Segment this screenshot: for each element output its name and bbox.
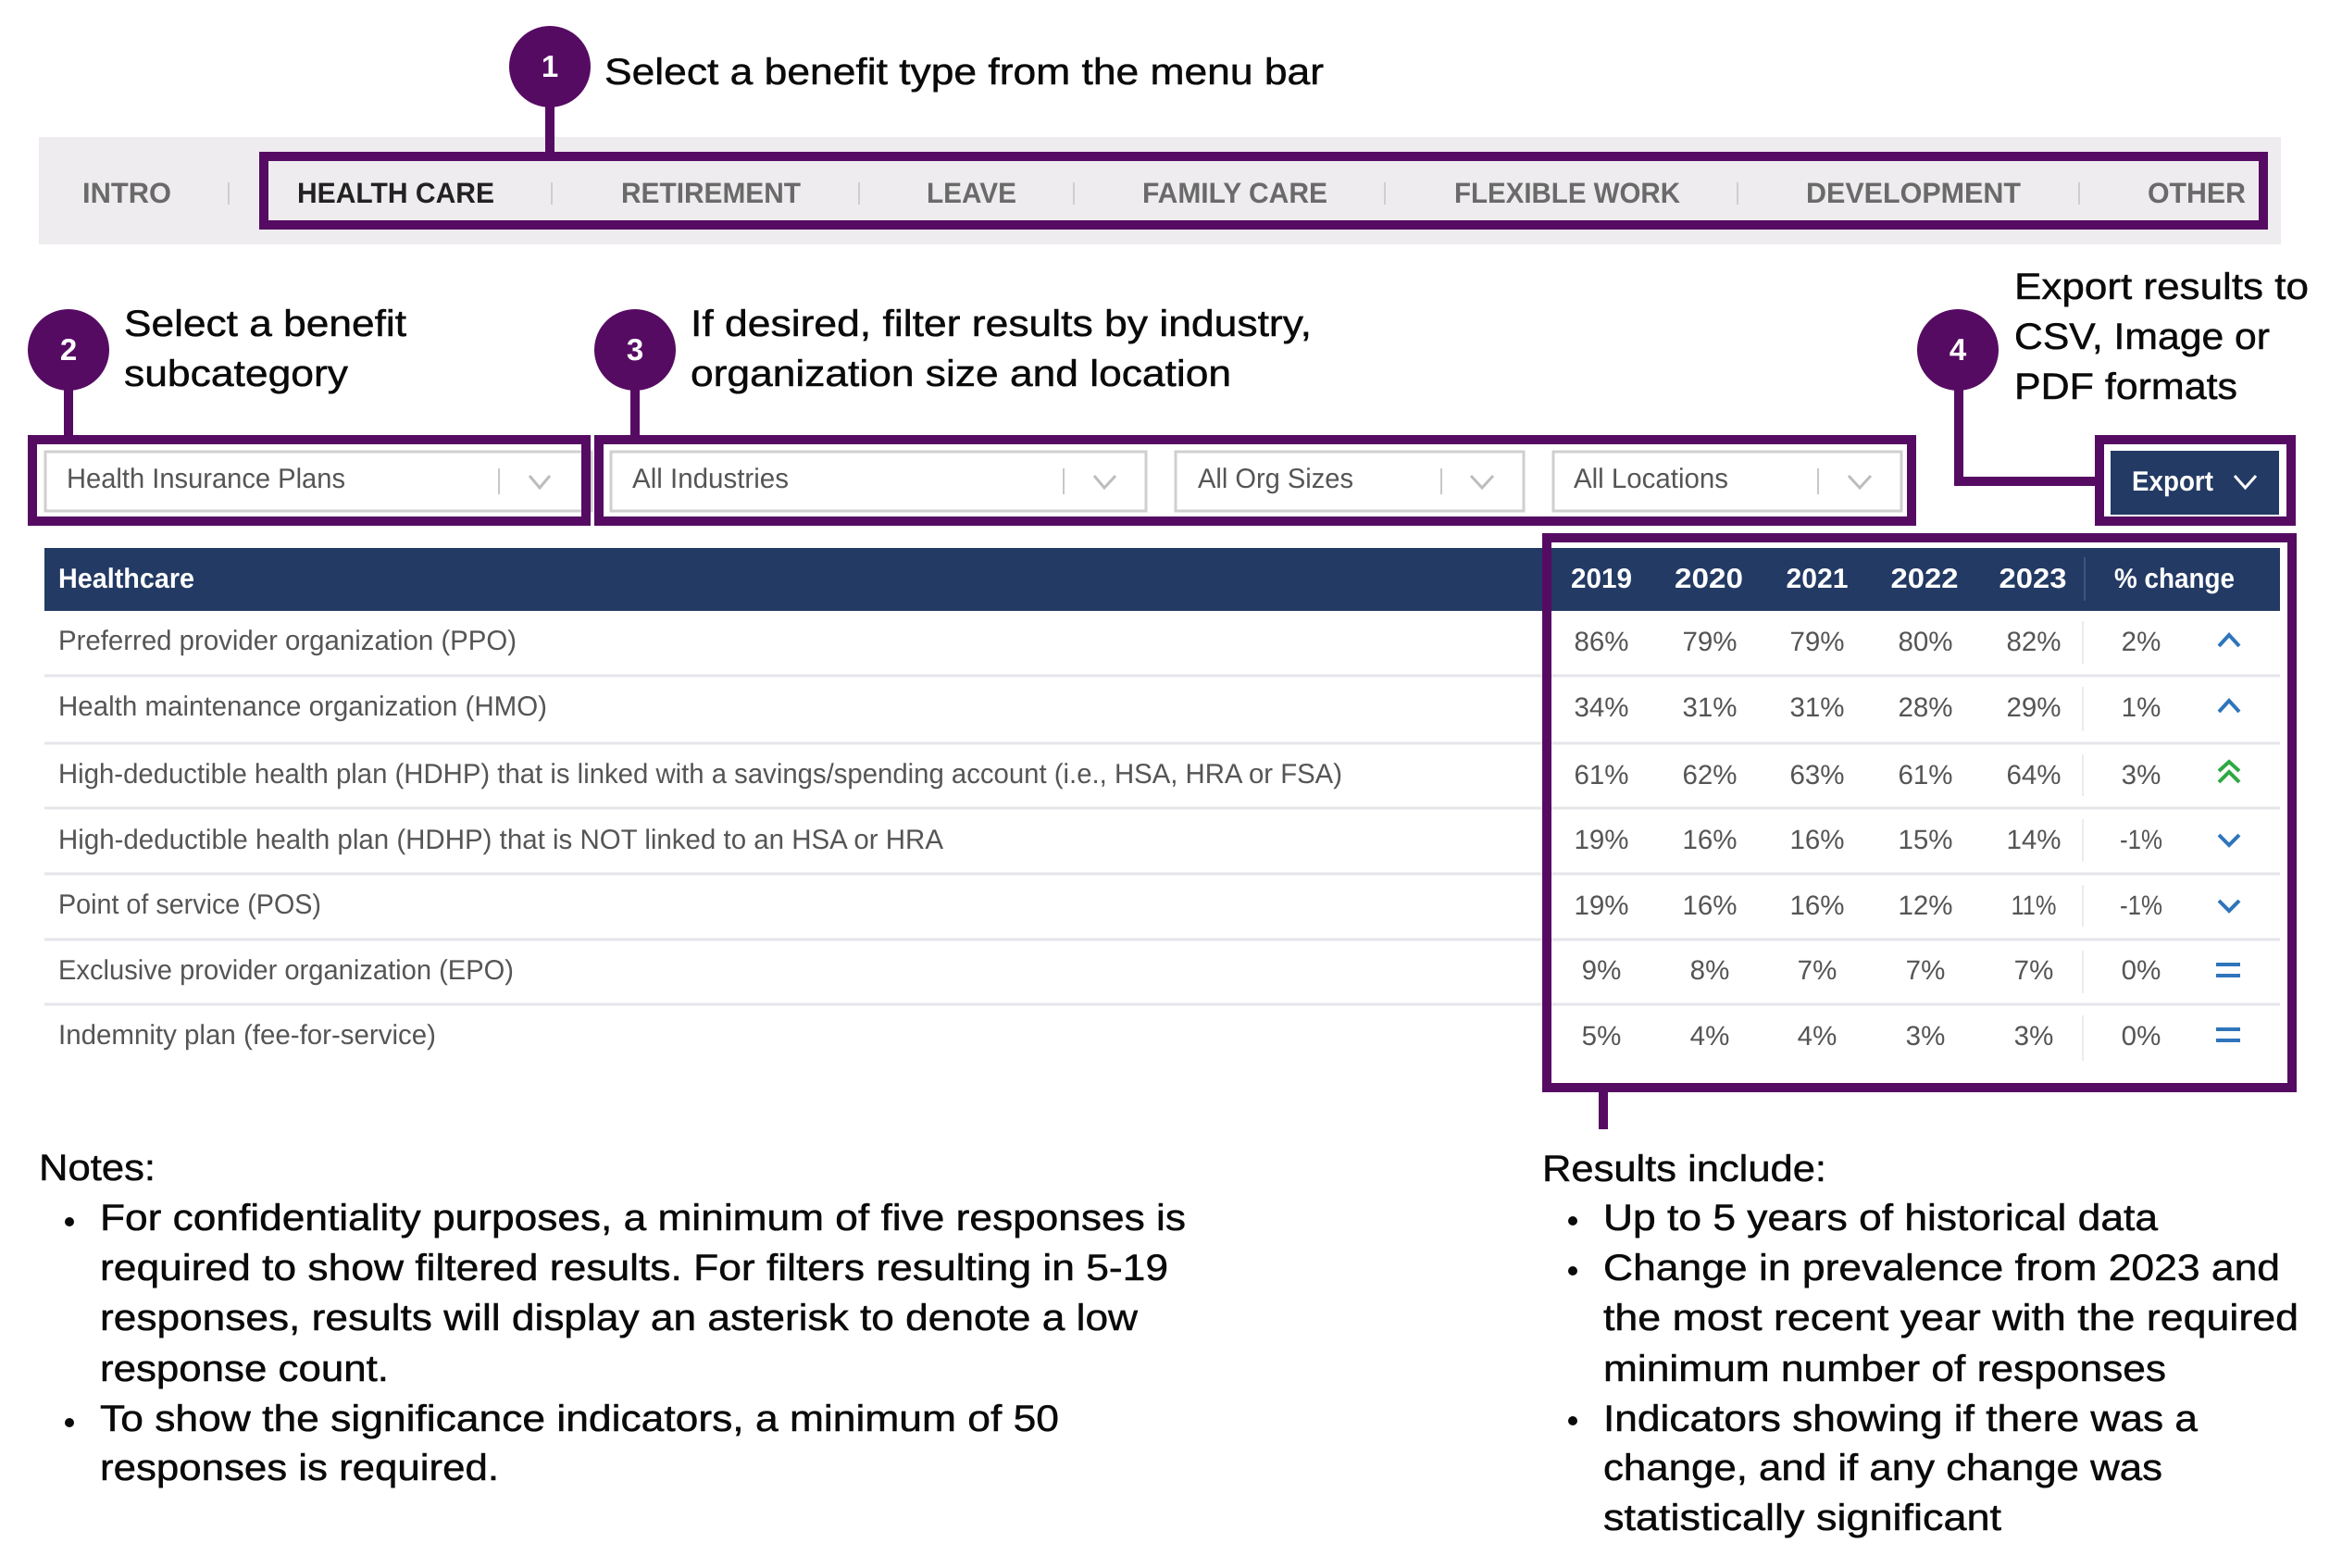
menu bar: [39, 137, 2281, 244]
table header: % change: [2114, 564, 2235, 594]
row: EPO: 0%: [2122, 955, 2161, 986]
row: POS: -1%: [2120, 890, 2162, 921]
row: PPO: 79%: [1789, 627, 1845, 657]
row: HDHP not linked: 14%: [2006, 825, 2062, 855]
callout 2: subcategory: [28, 304, 586, 521]
results include text block: statistically significant: [1603, 1498, 2001, 1538]
row: HDHP not linked: High-deductible health plan (HDHP) that is NOT linked to an HSA or HRA: [58, 825, 943, 855]
row: indemnity: 4%: [1798, 1021, 1837, 1052]
callout 1: benefit type: [264, 26, 2263, 225]
dropdown: org sizes: All Org Sizes: [1198, 464, 1353, 494]
menu bar: FLEXIBLE WORK: [1454, 177, 1681, 209]
row: POS: 16%: [1789, 890, 1845, 921]
callout 3: filters: [594, 304, 1912, 521]
callout 2: subcategory: subcategory: [124, 354, 348, 394]
notes text block: responses is required.: [100, 1448, 499, 1488]
row: EPO: 8%: [1690, 955, 1729, 986]
row: HMO: Health maintenance organization (HMO): [58, 691, 547, 722]
dropdown: locations: All Locations: [1574, 464, 1728, 494]
row: EPO: 7%: [1906, 955, 1945, 986]
row: HMO: 29%: [2006, 692, 2062, 723]
row: POS: [44, 885, 2280, 940]
row: HDHP not linked: 16%: [1789, 825, 1845, 855]
results include text block: Change in prevalence from 2023 and: [1603, 1248, 2280, 1288]
row: PPO: Preferred provider organization (PPO): [58, 626, 517, 656]
dropdown: org sizes: [1176, 452, 1524, 511]
dropdown: subcategory: [45, 452, 592, 511]
menu bar: DEVELOPMENT: [1806, 177, 2021, 209]
row: HDHP not linked: -1%: [2120, 825, 2162, 855]
callout 4: export: CSV, Image or: [2014, 317, 2270, 357]
row: HDHP linked: [44, 754, 2280, 808]
menu bar: RETIREMENT: [621, 177, 801, 209]
row: PPO: 2%: [2122, 627, 2161, 657]
row: HDHP linked: 3%: [2122, 760, 2161, 790]
row: POS: Point of service (POS): [58, 890, 321, 920]
notes text block: Notes:: [39, 1148, 156, 1188]
row: indemnity: 5%: [1582, 1021, 1621, 1052]
dropdown: industries: [611, 452, 1146, 511]
row: HDHP linked: 64%: [2006, 760, 2062, 790]
row: HDHP linked: 61%: [1574, 760, 1629, 790]
row: PPO: 79%: [1682, 627, 1738, 657]
callout 3: filters: If desired, filter results by industry,: [691, 304, 1312, 344]
row: HDHP linked: 63%: [1789, 760, 1845, 790]
callout 1: benefit type: 1: [542, 49, 558, 83]
row: HDHP linked: 61%: [1898, 760, 1953, 790]
notes text block: response count.: [100, 1349, 389, 1389]
row: HDHP linked: 62%: [1682, 760, 1738, 790]
table header: 2019: [1571, 564, 1632, 594]
row: indemnity: 3%: [1906, 1021, 1945, 1052]
row: POS: 12%: [1898, 890, 1953, 921]
row: PPO: [44, 621, 2280, 676]
row: indemnity: Indemnity plan (fee-for-service): [58, 1020, 436, 1051]
row: indemnity: 4%: [1690, 1021, 1729, 1052]
table header: [44, 548, 2280, 611]
results include text block: [1542, 1149, 2298, 1538]
row: HMO: 34%: [1574, 692, 1629, 723]
results include text block: change, and if any change was: [1603, 1448, 2162, 1488]
callout 4: export: 4: [1950, 332, 1967, 367]
callout: results highlight box: [1547, 538, 2292, 1129]
export button: [2111, 451, 2279, 515]
row: HDHP not linked: [44, 819, 2280, 874]
row: HMO: [44, 687, 2280, 743]
row: POS: 19%: [1574, 890, 1629, 921]
row: HDHP not linked: 16%: [1682, 825, 1738, 855]
row: EPO: 9%: [1582, 955, 1621, 986]
row: indemnity: 3%: [2014, 1021, 2053, 1052]
results table: [44, 548, 2280, 1061]
row: HDHP not linked: 19%: [1574, 825, 1629, 855]
callout 2: subcategory: Select a benefit: [124, 304, 406, 344]
callout 4: export: PDF formats: [2014, 367, 2237, 407]
row: HDHP linked: High-deductible health plan (HDHP) that is linked with a savings/spending account (i.e., HSA, HRA or FSA): [58, 759, 1342, 790]
callout 4: export: Export results to: [2014, 267, 2309, 307]
row: EPO: [44, 951, 2280, 1004]
callout 3: filters: 3: [627, 332, 643, 367]
row: HMO: 1%: [2122, 692, 2161, 723]
callout 2: subcategory: 2: [60, 332, 77, 367]
results include text block: minimum number of responses: [1603, 1349, 2166, 1389]
menu bar: FAMILY CARE: [1142, 177, 1327, 209]
results include text block: Up to 5 years of historical data: [1603, 1198, 2159, 1238]
row: indemnity: [58, 1015, 2240, 1061]
row: HMO: 28%: [1898, 692, 1953, 723]
row: POS: 16%: [1682, 890, 1738, 921]
row: PPO: 82%: [2006, 627, 2062, 657]
table header: Healthcare: [58, 564, 194, 594]
row: HDHP not linked: 15%: [1898, 825, 1953, 855]
callout 3: filters: organization size and location: [691, 354, 1231, 394]
notes text block: For confidentiality purposes, a minimum of five responses is: [100, 1198, 1186, 1238]
table header: 2020: [1675, 564, 1743, 594]
table header: 2023: [1999, 564, 2066, 594]
row: PPO: 86%: [1574, 627, 1629, 657]
dropdown: industries: All Industries: [632, 464, 789, 494]
notes text block: [39, 1148, 1186, 1488]
notes text block: required to show filtered results. For filters resulting in 5-19: [100, 1248, 1168, 1288]
notes text block: responses, results will display an asterisk to denote a low: [100, 1298, 1138, 1338]
row: HMO: 31%: [1789, 692, 1845, 723]
menu bar: HEALTH CARE: [297, 177, 494, 209]
export button: Export: [2132, 467, 2213, 497]
row: POS: 11%: [2011, 890, 2057, 921]
table header: 2021: [1787, 564, 1848, 594]
menu bar: LEAVE: [927, 177, 1016, 209]
table header: 2022: [1890, 564, 1959, 594]
row: EPO: Exclusive provider organization (EPO): [58, 955, 514, 986]
results include text block: Results include:: [1542, 1149, 1826, 1189]
callout 4: export: [1917, 267, 2309, 521]
row: PPO: 80%: [1898, 627, 1953, 657]
menu bar: INTRO: [82, 177, 171, 209]
row: indemnity: 0%: [2122, 1021, 2161, 1052]
results include text block: the most recent year with the required: [1603, 1298, 2298, 1338]
notes text block: To show the significance indicators, a minimum of 50: [100, 1399, 1059, 1439]
dropdown: locations: [1553, 452, 1901, 511]
row: EPO: 7%: [2014, 955, 2053, 986]
menu bar: OTHER: [2148, 177, 2246, 209]
row: EPO: 7%: [1798, 955, 1837, 986]
callout 1: benefit type: Select a benefit type from the menu bar: [604, 52, 1324, 93]
row: HMO: 31%: [1682, 692, 1738, 723]
dropdown: subcategory: Health Insurance Plans: [67, 464, 345, 494]
results include text block: Indicators showing if there was a: [1603, 1399, 2199, 1439]
